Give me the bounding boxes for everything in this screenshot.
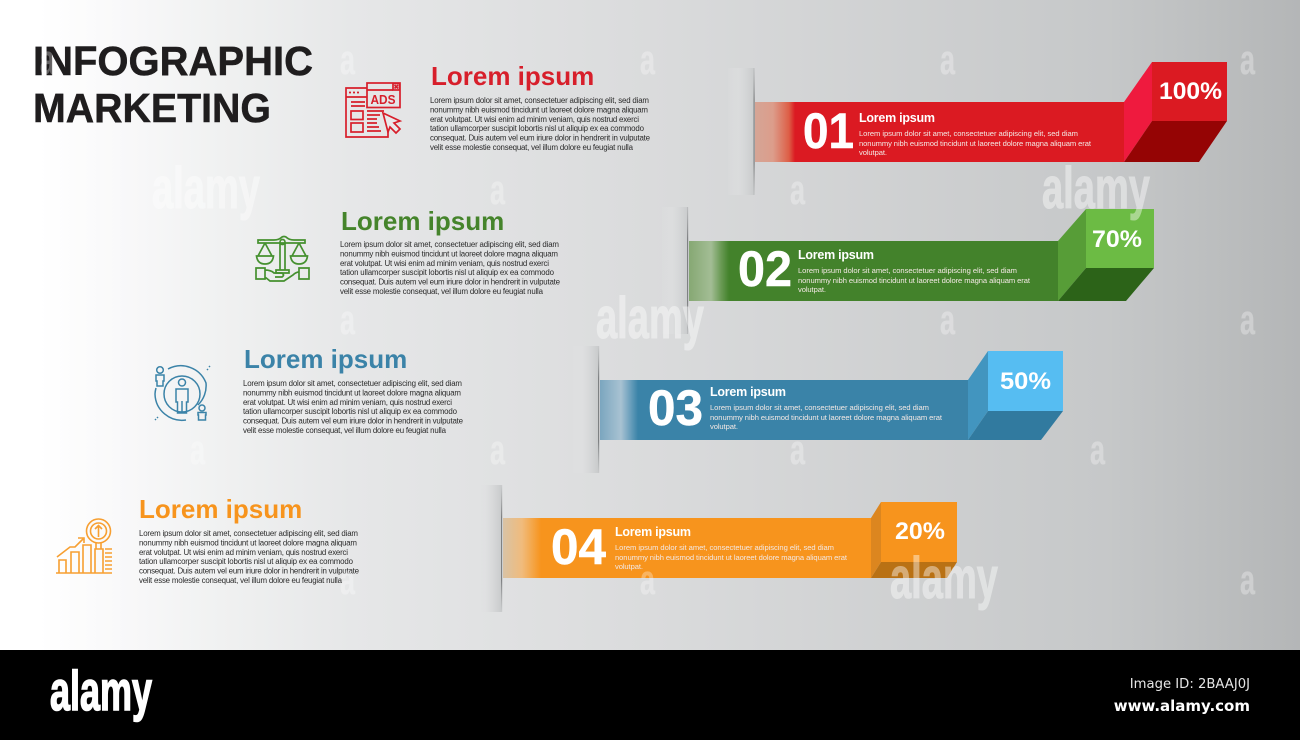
text block: step 02: Lorem ipsum: [341, 206, 504, 236]
watermark: a: [940, 36, 955, 83]
watermark: a: [790, 166, 805, 213]
3D percent box: 50%: 50%: [1000, 368, 1051, 395]
ribbon text 03: Lorem ipsum: [710, 385, 786, 399]
ribbon text 03: Lorem ipsum dolor sit amet, consectetuer adipiscing elit, sed diam: [710, 403, 929, 412]
watermark: alamy: [1042, 156, 1150, 221]
panel: step 04 ribbon: [476, 485, 957, 612]
watermark: a: [1240, 556, 1255, 603]
footer image id and url: [1114, 677, 1250, 715]
text block: step 03: consequat. Duis autem vel eum iriure dolor in hendrerit in vulputate: [243, 417, 464, 426]
text block: step 04: Lorem ipsum dolor sit amet, consectetuer adipiscing elit, sed diam: [139, 529, 358, 538]
text block: step 03: Lorem ipsum: [244, 344, 407, 374]
text block: step 01: consequat. Duis autem vel eum iriure dolor in hendrerit in vulputate: [430, 134, 651, 143]
ribbon text 03: volutpat.: [710, 422, 738, 431]
watermark: a: [490, 166, 505, 213]
text block: step 01: velit esse molestie consequat, vel illum dolore eu feugiat nulla: [430, 143, 634, 152]
text block: step 02: consequat. Duis autem vel eum iriure dolor in hendrerit in vulputate: [340, 278, 561, 287]
ribbon text 01: [859, 111, 1092, 157]
text block: step 03: velit esse molestie consequat, vel illum dolore eu feugiat nulla: [243, 426, 447, 435]
3D percent box: 100%: [1124, 62, 1227, 162]
text block: step 01: Lorem ipsum: [431, 61, 594, 91]
watermark: a: [640, 556, 655, 603]
footer bar: [0, 650, 1300, 740]
watermark: a: [1240, 36, 1255, 83]
ribbon text 02: Lorem ipsum: [798, 248, 874, 262]
watermark: alamy: [890, 546, 998, 611]
text block: step 04: velit esse molestie consequat, vel illum dolore eu feugiat nulla: [139, 576, 343, 585]
footer image id and url: Image ID: 2BAAJ0J: [1130, 677, 1250, 692]
ribbon text 03: [710, 385, 943, 431]
text block: step 01: erat volutpat. Ut wisi enim ad minim veniam, quis nostrud exerci: [430, 115, 639, 124]
text block: step 01: [430, 61, 651, 152]
title: MARKETING: [33, 85, 271, 131]
3D percent box: 20%: 20%: [895, 518, 945, 545]
number 03: 03: [648, 380, 703, 436]
watermark: a: [40, 36, 55, 83]
watermark: alamy: [596, 286, 704, 351]
icon: ads browser window: ADS: [370, 93, 396, 107]
text block: step 04: erat volutpat. Ut wisi enim ad minim veniam, quis nostrud exerci: [139, 548, 348, 557]
text block: step 02: velit esse molestie consequat, vel illum dolore eu feugiat nulla: [340, 287, 544, 296]
text block: step 02: erat volutpat. Ut wisi enim ad minim veniam, quis nostrud exerci: [340, 259, 549, 268]
watermark: alamy: [152, 156, 260, 221]
title: [33, 38, 313, 131]
text block: step 03: tation ullamcorper suscipit lobortis nisl ut aliquip ex ea commodo: [243, 407, 458, 416]
ribbon text 04: volutpat.: [615, 562, 643, 571]
watermark: a: [640, 36, 655, 83]
ribbon text 04: [615, 525, 848, 571]
ribbon text 03: nonummy nibh euismod tincidunt ut laoreet dolore magna aliquam erat: [710, 413, 943, 422]
text block: step 04: Lorem ipsum: [139, 494, 302, 524]
3D percent box: 70%: 70%: [1092, 226, 1142, 253]
3D percent box: 70%: [1058, 209, 1154, 301]
watermark: a: [490, 426, 505, 473]
text block: step 02: tation ullamcorper suscipit lobortis nisl ut aliquip ex ea commodo: [340, 268, 555, 277]
text block: step 02: [340, 206, 561, 296]
text block: step 04: nonummy nibh euismod tincidunt ut laoreet dolore magna aliquam: [139, 538, 357, 547]
watermark: a: [340, 36, 355, 83]
panel: step 01 ribbon: [728, 62, 1227, 195]
text block: step 01: tation ullamcorper suscipit lobortis nisl ut aliquip ex ea commodo: [430, 124, 645, 133]
ribbon text 04: Lorem ipsum dolor sit amet, consectetuer adipiscing elit, sed diam: [615, 543, 834, 552]
footer image id and url: www.alamy.com: [1114, 697, 1250, 715]
watermark: a: [1240, 296, 1255, 343]
3D percent box: 50%: [968, 351, 1063, 440]
watermark: a: [340, 556, 355, 603]
panel: step 02 ribbon: [662, 207, 1154, 334]
text block: step 02: nonummy nibh euismod tincidunt ut laoreet dolore magna aliquam: [340, 249, 558, 258]
watermark: a: [940, 296, 955, 343]
ribbon text 04: Lorem ipsum: [615, 525, 691, 539]
ribbon text 01: nonummy nibh euismod tincidunt ut laoreet dolore magna aliquam erat: [859, 139, 1092, 148]
title: INFOGRAPHIC: [33, 38, 313, 84]
watermark: a: [790, 426, 805, 473]
text block: step 03: Lorem ipsum dolor sit amet, consectetuer adipiscing elit, sed diam: [243, 379, 462, 388]
icon: ads browser window: [346, 83, 400, 137]
icon: growth chart with magnifier: [56, 519, 112, 573]
panel: step 03 ribbon: [573, 346, 1063, 473]
text block: step 04: [139, 494, 360, 585]
ribbon text 02: volutpat.: [798, 285, 826, 294]
icon: scales on hands: [256, 236, 309, 281]
text block: step 01: nonummy nibh euismod tincidunt ut laoreet dolore magna aliquam: [430, 105, 648, 114]
ribbon text 02: Lorem ipsum dolor sit amet, consectetuer adipiscing elit, sed diam: [798, 266, 1017, 275]
text block: step 03: nonummy nibh euismod tincidunt ut laoreet dolore magna aliquam: [243, 388, 461, 397]
ribbon text 01: volutpat.: [859, 148, 887, 157]
ribbon text 02: nonummy nibh euismod tincidunt ut laoreet dolore magna aliquam erat: [798, 276, 1031, 285]
ribbon text 02: [798, 248, 1031, 294]
ribbon text 01: Lorem ipsum: [859, 111, 935, 125]
watermark: a: [190, 426, 205, 473]
text block: step 04: tation ullamcorper suscipit lobortis nisl ut aliquip ex ea commodo: [139, 557, 354, 566]
ribbon text 04: nonummy nibh euismod tincidunt ut laoreet dolore magna aliquam erat: [615, 553, 848, 562]
watermark: a: [340, 296, 355, 343]
text block: step 03: [243, 344, 464, 435]
number 01: 01: [803, 103, 854, 159]
text block: step 04: consequat. Duis autem vel eum iriure dolor in hendrerit in vulputate: [139, 567, 360, 576]
3D percent box: 100%: 100%: [1159, 78, 1222, 105]
text block: step 03: erat volutpat. Ut wisi enim ad minim veniam, quis nostrud exerci: [243, 398, 452, 407]
3D percent box: 20%: [871, 502, 957, 578]
number 02: 02: [738, 241, 792, 297]
text block: step 01: Lorem ipsum dolor sit amet, consectetuer adipiscing elit, sed diam: [430, 96, 649, 105]
footer logo: alamy: [50, 659, 152, 722]
number 04: 04: [551, 519, 606, 575]
ribbon text 01: Lorem ipsum dolor sit amet, consectetuer adipiscing elit, sed diam: [859, 129, 1078, 138]
icon: people in circle: [155, 366, 210, 420]
watermark: a: [1090, 426, 1105, 473]
watermark: [40, 36, 1255, 611]
text block: step 02: Lorem ipsum dolor sit amet, consectetuer adipiscing elit, sed diam: [340, 240, 559, 249]
